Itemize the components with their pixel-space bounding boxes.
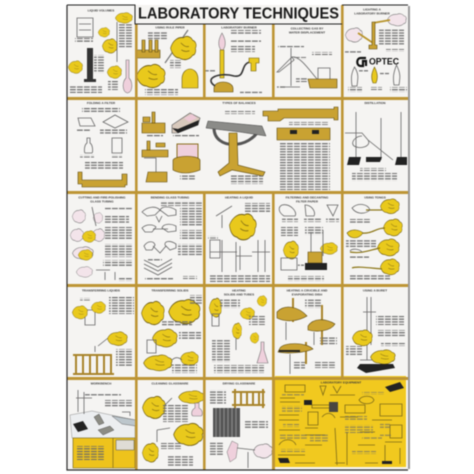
heading: filtering and decanting: FILTER PAPER [296, 200, 319, 204]
icon: hands and tubes [209, 296, 267, 350]
icon: bending hands bottom [144, 241, 176, 253]
icon: small yellow balance [142, 112, 165, 133]
panel: filtering and decanting [279, 196, 339, 281]
icon: dish and yellow spoon [347, 204, 370, 252]
captions: folding [76, 129, 127, 169]
captions: transferring solids [162, 295, 203, 373]
captions: equipment labels [280, 392, 392, 454]
icon: test tube rack [137, 40, 160, 58]
heading: using a buret: USING A BURET [363, 288, 387, 292]
captions: balances [147, 111, 263, 184]
heading: heating: SOLIDS AND TUBES [224, 292, 254, 296]
icon: water trough [308, 79, 337, 88]
icon: pipette [116, 22, 118, 62]
heading: cutting glass: CUTTING AND FIRE-POLISHING [78, 196, 126, 200]
icon: left hand pouring [283, 241, 298, 259]
icon: test tube stands [210, 240, 270, 272]
heading: types of balances: TYPES OF BALANCES [222, 101, 256, 105]
icon: long yellow beam [263, 107, 338, 121]
heading: using a pipet: USING RULE PIPER [155, 26, 185, 30]
captions: liquid volumes [70, 24, 132, 93]
icon: lower left balance [142, 141, 168, 182]
icon: black base [357, 364, 395, 373]
icon: dark drying rack [213, 408, 240, 437]
logo: Optec: OPTEC [369, 56, 399, 66]
icon: pink flask [192, 403, 202, 416]
icon: cabinet balance [173, 144, 200, 173]
icon: upper burner stand [277, 298, 307, 340]
heading: lighting a burner [354, 8, 390, 16]
icon: yellow balance box [277, 128, 330, 140]
icon: gas jar [318, 68, 330, 82]
illustration: bench top [70, 411, 135, 438]
captions: subheading [82, 107, 120, 112]
heading: transferring solids: TRANSFERRING SOLIDS [152, 288, 188, 292]
illustration: glassware on shelf [116, 440, 134, 450]
icon: yellow balance [78, 172, 127, 187]
heading: filtering and decanting: FILTERING AND DECANTING [286, 196, 329, 200]
illustration: black book [73, 421, 88, 432]
icon: graduated cylinder [84, 48, 96, 82]
heading: collecting gas: WATER DISPLACEMENT [289, 30, 325, 34]
icon: brush and tube [157, 398, 172, 442]
panel: drying glassware [210, 382, 272, 468]
captions: using tongs [346, 219, 390, 280]
icon: upper hand [171, 36, 196, 60]
heading: drying glassware: DRYING GLASSWARE [223, 382, 255, 386]
icon: tongs and spoons [350, 210, 385, 269]
captions: workbench [85, 393, 132, 407]
panel: transferring solids [141, 288, 203, 373]
icon: four yellow hands [377, 199, 402, 275]
captions: drying glassware [210, 390, 268, 456]
heading: collecting gas: COLLECTING GAS BY [291, 26, 324, 30]
heading: collecting gas [289, 26, 325, 34]
icon: hand pouring [95, 332, 127, 352]
icon: yellow burner [358, 20, 390, 49]
icon: top hands [141, 299, 200, 325]
heading: transferring liquids: TRANSFERRING LIQUIDS [82, 288, 120, 292]
icon: dark equipment pieces [278, 382, 404, 464]
captions: bending glass [145, 201, 202, 280]
icon: hands measuring [68, 13, 132, 78]
panel: using a pipet [137, 26, 198, 95]
illustration: sink and tap [112, 412, 136, 426]
icon: hands and beaker [72, 302, 106, 325]
heading: laboratory equipment: LABORATORY EQUIPMENT [321, 380, 361, 384]
panel: types of balances [142, 101, 338, 190]
icon: right hand pouring [320, 243, 337, 254]
illustration: grey items [94, 414, 114, 435]
captions: heating liquid [208, 203, 270, 282]
heading: heating crucible: EVAPORATING DISH [292, 292, 323, 296]
captions: buret [346, 316, 405, 356]
heading: heating a liquid: HEATING A LIQUID [225, 196, 254, 200]
captions: flames [348, 70, 407, 92]
heading: heating [224, 288, 254, 296]
panel: folding a filter [76, 101, 128, 187]
panel: using spatulas and tongs [346, 196, 402, 280]
icon: yellow clamp on black base [305, 252, 327, 270]
icon: lower burner stand [278, 342, 313, 374]
captions: crucible [294, 299, 337, 369]
icon: test tube rack [73, 354, 114, 375]
icon: apparatus bases [347, 157, 407, 165]
icon: pink hands [345, 14, 406, 42]
title: LABORATORY TECHNIQUES [138, 6, 339, 22]
captions: using a pipet [145, 31, 181, 95]
icon: filter stand [281, 230, 323, 270]
heading: lighting a burner: LIGHTING A [363, 8, 382, 12]
captions: cleaning glassware [160, 405, 193, 467]
heading: bending glass: BENDING GLASS TUBING [151, 196, 190, 200]
poster background [67, 5, 408, 470]
heading: heating crucible [287, 288, 328, 296]
panel: laboratory burner [205, 26, 262, 94]
background: yellow panel [275, 376, 406, 467]
panel: heating a liquid [208, 196, 270, 282]
panel: cutting and fire-polishing glass tubing [70, 196, 133, 281]
panel: laboratory equipment [275, 376, 406, 467]
icon: wooden rack [232, 389, 265, 408]
icon: yellow hand with tongs [216, 206, 258, 241]
icon: ring stand and flask [277, 48, 318, 87]
icon: hands [142, 391, 204, 462]
panel: workbench [70, 382, 136, 468]
icon: folded papers [78, 115, 128, 128]
icon: three flames [351, 65, 400, 86]
poster outer border [67, 5, 408, 470]
heading: heating: HEATING [232, 288, 246, 292]
icon: hands cutting tube [72, 207, 103, 226]
panel: bending glass tubing [142, 196, 202, 280]
page edge shadow [408, 6, 410, 469]
icon: lower hand [137, 64, 165, 88]
heading: folding a filter: FOLDING A FILTER [87, 101, 116, 105]
panel: lighting a laboratory burner [345, 8, 407, 92]
heading: heating crucible: HEATING A CRUCIBLE AND [287, 288, 328, 292]
captions: filtering [281, 218, 339, 281]
icon: upper hand [352, 330, 372, 346]
icon: distillation apparatus [345, 112, 401, 160]
heading: liquid volumes: LIQUID VOLUMES [88, 8, 114, 12]
heading: workbench: WORKBENCH [91, 382, 112, 386]
icon: hands snapping tube [70, 229, 105, 242]
captions: balance instructions [280, 122, 330, 190]
icon: rubber tube and valve [211, 58, 259, 86]
icon: beaker [77, 18, 93, 37]
icon: lower hand [371, 350, 395, 364]
icon: buret stand [360, 297, 376, 360]
heading: lighting a burner: LABORATORY BURNER [354, 12, 390, 16]
icon: pink hand and flame [76, 267, 115, 280]
heading: using tongs: USING TONGS [364, 196, 386, 200]
illustration: yellow cabinets [73, 438, 135, 468]
panel: cleaning glassware [142, 382, 204, 467]
icon: middle hand [147, 329, 177, 353]
panel: collecting gas by water displacement [277, 26, 337, 88]
panel: heating a crucible and evaporating dish [277, 288, 337, 374]
grid: gold dividers [67, 5, 408, 470]
icon: right burner stand [308, 305, 335, 345]
illustration: support stand [76, 390, 92, 414]
panel: transferring liquids [72, 288, 134, 375]
heading: cutting glass: GLASS TUBING [90, 200, 114, 204]
icon: bending hands middle [142, 224, 176, 232]
heading: cutting glass [78, 196, 126, 204]
captions: cutting glass [103, 207, 133, 281]
icon: bunsen burner [214, 33, 233, 92]
heading: cleaning glassware: CLEANING GLASSWARE [152, 382, 188, 386]
heading: distillation: DISTILLATION [364, 101, 386, 105]
icon: filter paper steps [279, 205, 338, 216]
icon: pink hands [227, 441, 272, 468]
captions: collecting gas [277, 46, 332, 88]
icon: pipette [165, 30, 188, 63]
icon: bottle and beaker [84, 138, 122, 153]
icon: triple beam balance [206, 121, 266, 176]
captions: lighting burner [345, 29, 404, 53]
icon: digital balance [172, 113, 200, 133]
captions: heating [212, 299, 265, 373]
icon: equipment line drawings [278, 385, 402, 465]
panel: distillation [345, 101, 407, 181]
icon: pink volumetric flask [123, 60, 132, 93]
title box [67, 5, 408, 24]
captions: distillation [352, 168, 397, 181]
icon: pink flask [257, 342, 268, 363]
panel: heating test tubes [209, 288, 268, 373]
icon: hands polishing tube [72, 247, 93, 260]
captions: laboratory burner [205, 30, 262, 94]
panel: liquid volumes [68, 8, 132, 93]
heading: filtering and decanting [286, 196, 329, 204]
captions: transferring liquids [80, 296, 134, 367]
icon: bending hands top [142, 207, 176, 222]
icon: bottom hands [144, 352, 198, 371]
icon: pipette bulb [182, 69, 198, 88]
icon: zigzag bent tubes [144, 259, 172, 275]
panel: using a buret [346, 288, 405, 373]
heading: laboratory burner: LABORATORY BURNER [221, 26, 257, 30]
